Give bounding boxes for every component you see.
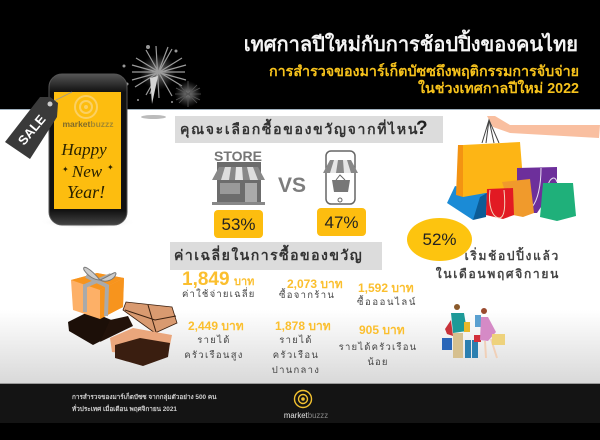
heading: average spend: ค่าเฉลี่ยในการซื้อของขวัญ [174, 247, 363, 263]
label: buy from store: ซื้อจากร้าน [279, 290, 335, 301]
stat: 1,592: 1,592 บาท [358, 281, 414, 295]
label: high income [184, 334, 244, 361]
title: เทศกาลปีใหม่กับการช้อปปิ้งของคนไทย [244, 34, 578, 56]
text: VS: VS [278, 174, 306, 197]
heading: where to buy: ? [416, 118, 428, 139]
label: average spend: ค่าใช้จ่ายเฉลี่ย [182, 289, 256, 300]
footer note: การสำรวจของมาร์เก็ตบัซซ จากกลุ่มตัวอย่าง 500 คน [72, 394, 217, 401]
label: middle income: รายได้ [279, 335, 313, 346]
label: middle income: ครัวเรือน [273, 350, 319, 361]
icon: family shopping [442, 304, 505, 358]
logo: marketbuzzz: marketbuzzz [284, 411, 328, 420]
text: started in November [436, 246, 560, 281]
badge: 53% [214, 210, 263, 238]
stat: 1,849: 1,849 บาท [182, 269, 254, 290]
label: high income: ครัวเรือนสูง [184, 350, 244, 361]
label: high income: รายได้ [197, 335, 231, 346]
footer band [0, 383, 600, 440]
label: buy online: ซื้อออนไลน์ [357, 297, 417, 308]
header band [0, 0, 600, 110]
icon: store: STORE [214, 148, 262, 164]
icon: gift boxes [68, 266, 178, 366]
label: middle income: ปานกลาง [272, 365, 320, 376]
icon: smartphone: ✦ [62, 165, 69, 174]
lower gradient background [0, 310, 600, 383]
label: low income [339, 342, 417, 368]
footer note: ทั่วประเทศ เมื่อเดือน พฤศจิกายน 2021 [72, 406, 177, 413]
firework shadow [141, 115, 166, 119]
footer note [72, 392, 217, 413]
badge: 53%: 53% [221, 215, 256, 234]
stat: 2,073: 2,073 บาท [287, 277, 343, 291]
text: started in November: ในเดือนพฤศจิกายน [436, 267, 560, 281]
stat: 905: 905 บาท [359, 323, 405, 337]
text: started in November: เริ่มช้อปปิ้งแล้ว [465, 249, 560, 263]
badge: 52%: 52% [422, 230, 457, 249]
label: low income: น้อย [367, 357, 389, 368]
subtitle: การสำรวจของมาร์เก็ตบัซซถึงพฤติกรรมการจับจ่าย [269, 64, 579, 80]
icon: smartphone: marketbuzzz [62, 119, 114, 129]
badge: 47%: 47% [324, 213, 359, 232]
icon: smartphone: ✦ [107, 163, 114, 172]
label: middle income [272, 334, 320, 376]
icon: smartphone: Year! [67, 182, 105, 202]
heading: where to buy: คุณจะเลือกซื้อของขวัญจากที่ไหน [180, 121, 419, 137]
icon: store [212, 148, 265, 205]
stat: 1,878: 1,878 บาท [275, 319, 331, 333]
badge: 52% [407, 218, 472, 261]
heading: where to buy [175, 116, 443, 143]
icon: smartphone: SALE [15, 111, 49, 148]
icon: smartphone [5, 74, 128, 227]
heading: average spend [170, 242, 382, 270]
icon: smartphone: Happy [60, 140, 107, 159]
icon: fireworks [122, 45, 201, 107]
icon: shopping bags and arm [447, 116, 600, 221]
label: low income: รายได้ครัวเรือน [339, 342, 417, 353]
icon: smartphone: New [71, 162, 103, 181]
subtitle: ในช่วงเทศกาลปีใหม่ 2022 [418, 81, 579, 97]
subtitle [269, 62, 579, 97]
stat: 2,449: 2,449 บาท [188, 319, 244, 333]
logo: marketbuzzz [284, 390, 328, 420]
icon: mobile shop [323, 150, 358, 205]
badge: 47% [317, 208, 366, 236]
